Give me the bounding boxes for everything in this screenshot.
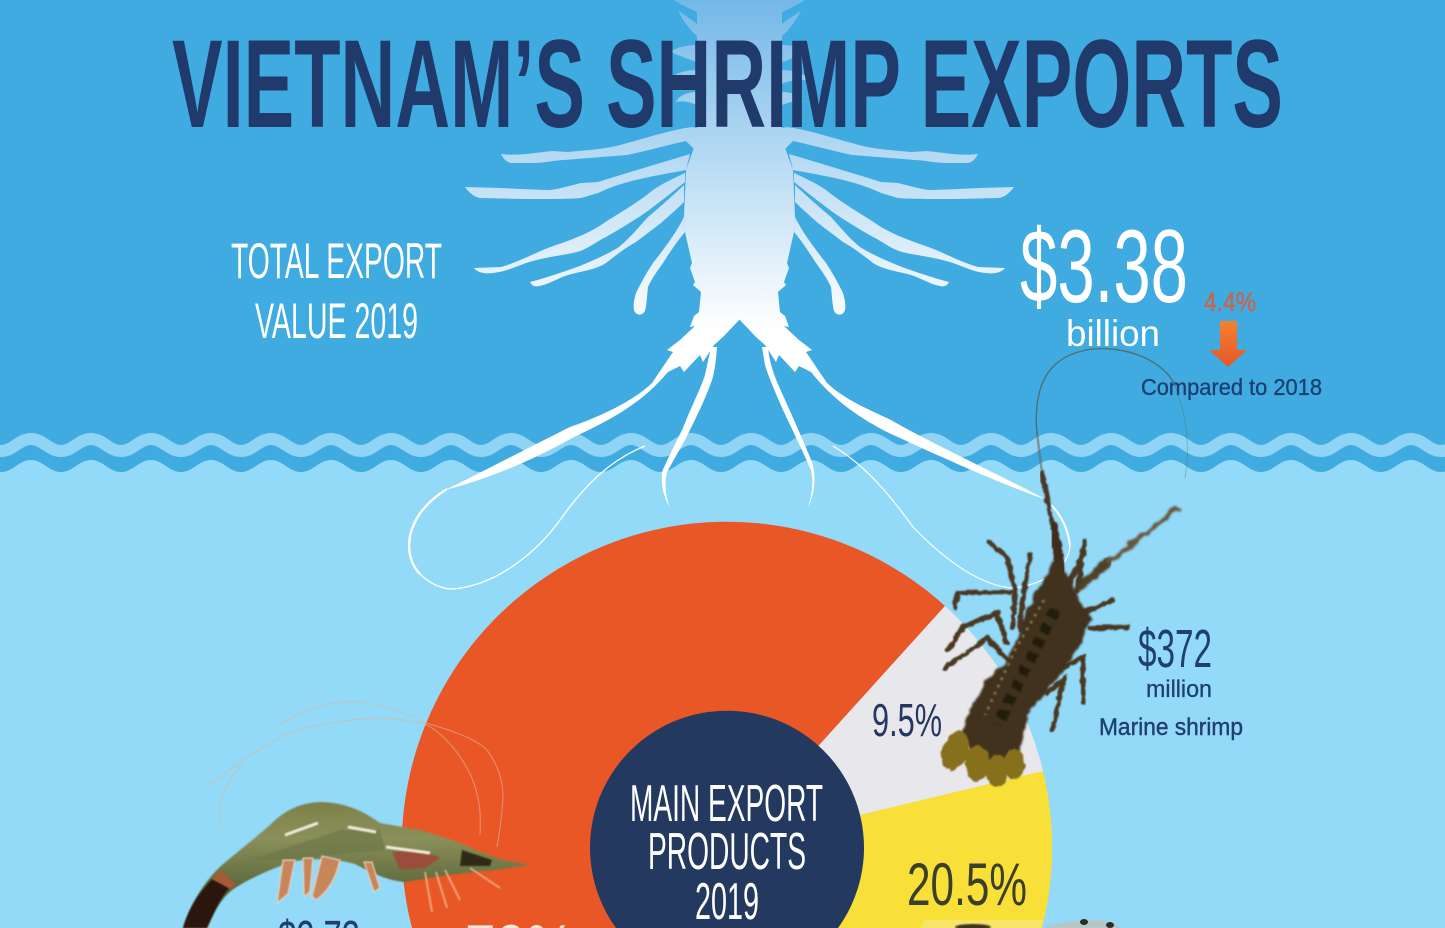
center circle: [590, 711, 864, 928]
background: upper water with wave edge: [0, 0, 1445, 472]
donut center label: MAIN EXPORT: [630, 775, 823, 833]
total export label: TOTAL EXPORT: [231, 233, 442, 289]
total export value: billion: [1066, 313, 1160, 354]
wave band: [0, 439, 1445, 451]
photo: whiteleg shrimp: [183, 702, 530, 928]
shrimp silhouette: [465, 0, 1014, 383]
marine shrimp value: million: [1146, 676, 1212, 703]
change versus 2018: [1141, 287, 1322, 400]
total export label: VALUE 2019: [255, 293, 418, 349]
label: 9.5 percent: 9.5%: [872, 694, 942, 746]
marine shrimp value: Marine shrimp: [1099, 714, 1243, 741]
change versus 2018: 4.4%: [1204, 287, 1256, 317]
total export value: [1020, 209, 1188, 354]
label: 20.5 percent: 20.5%: [907, 851, 1027, 918]
slice: 70 percent: [402, 522, 945, 928]
icon: down arrow: [1209, 321, 1247, 367]
photo: marine shrimp: [936, 349, 1188, 787]
change versus 2018: Compared to 2018: [1141, 374, 1322, 400]
marine shrimp value: [1099, 619, 1243, 741]
donut chart: [402, 522, 1052, 928]
donut center label: PRODUCTS: [648, 823, 806, 881]
total export value: $3.38: [1020, 209, 1188, 325]
photo: black tiger shrimp top: [920, 919, 1122, 928]
shrimp tail and antennae: [409, 347, 1070, 589]
donut center label: [630, 775, 823, 928]
slice: 20.5 percent: [727, 771, 1052, 928]
slice: 9.5 percent: [727, 606, 1043, 847]
total export label: [231, 233, 442, 349]
marine shrimp value: $372: [1138, 619, 1212, 679]
